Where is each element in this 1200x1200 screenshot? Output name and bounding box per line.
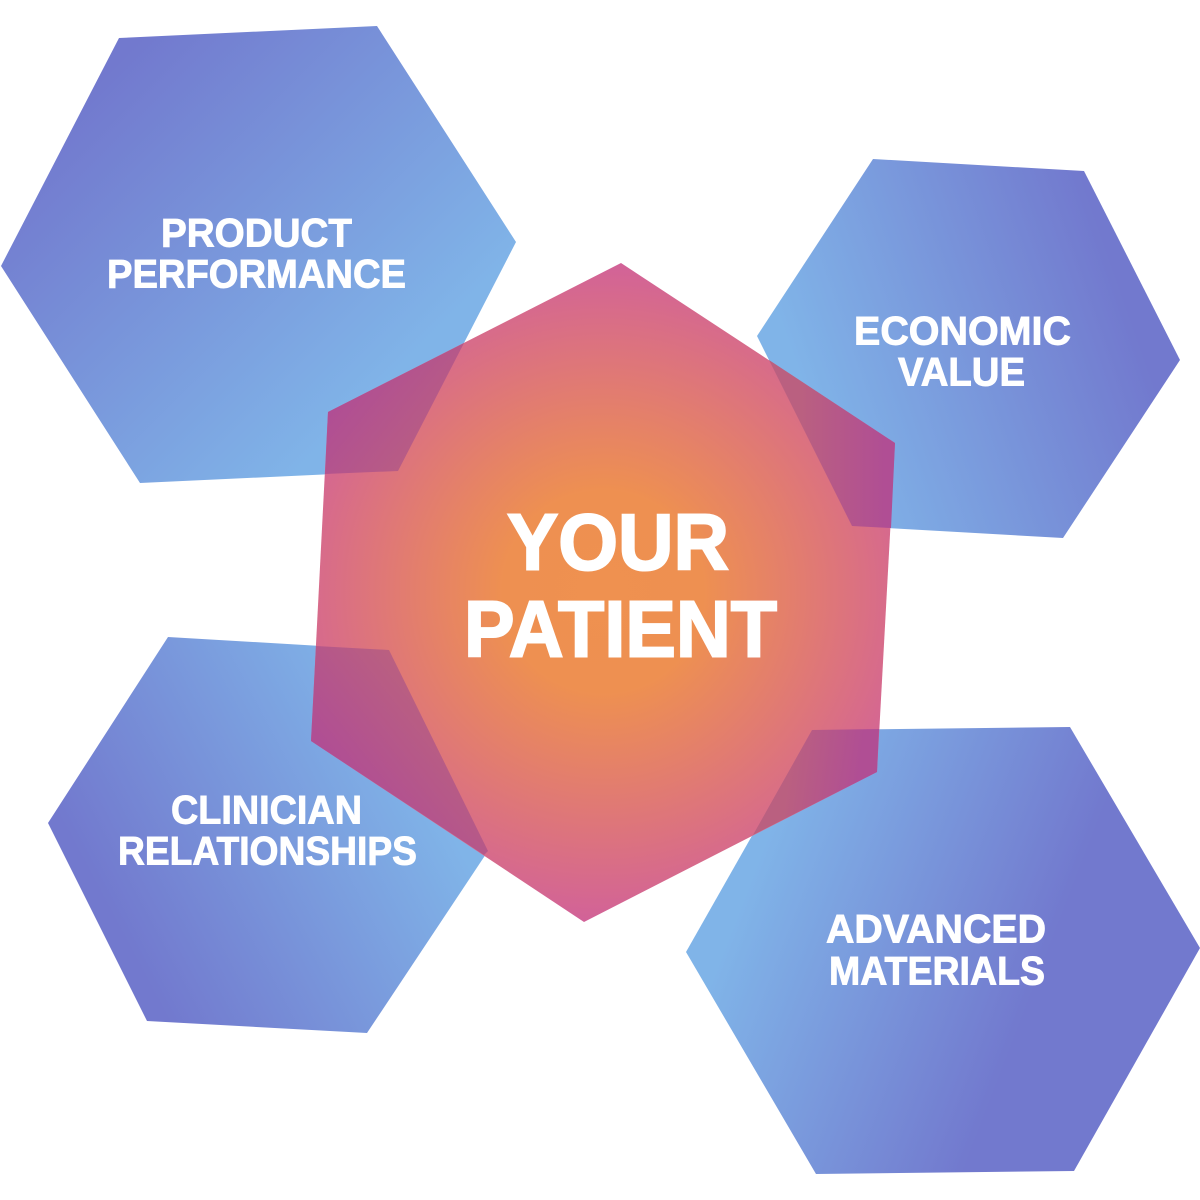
label: advanced materials: ADVANCED xyxy=(826,908,1046,952)
label: clinician relationships: RELATIONSHIPS xyxy=(118,830,417,874)
central hexagon: your patient xyxy=(311,263,895,922)
label: advanced materials xyxy=(826,908,1046,994)
label: economic value xyxy=(854,310,1071,394)
hexagon: economic value xyxy=(757,159,1180,538)
label: economic value: ECONOMIC xyxy=(854,310,1071,354)
label: clinician relationships: CLINICIAN xyxy=(171,788,362,832)
label: clinician relationships xyxy=(118,788,417,874)
label: product performance: PRODUCT xyxy=(161,212,352,256)
label: product performance: PERFORMANCE xyxy=(107,252,406,296)
hexagon: clinician relationships xyxy=(48,637,488,1033)
label: advanced materials: MATERIALS xyxy=(829,950,1045,994)
label: economic value: VALUE xyxy=(898,350,1025,394)
label: product performance xyxy=(107,212,406,296)
overlap: economic value with centre xyxy=(769,360,895,528)
hexagon: product performance xyxy=(1,26,516,483)
title: your patient xyxy=(464,498,777,674)
title: your patient: PATIENT xyxy=(464,584,777,674)
overlap: clinician relationships with centre xyxy=(311,646,488,855)
title: your patient: YOUR xyxy=(507,498,729,586)
overlap: advanced materials with centre xyxy=(753,729,879,835)
hexagon: advanced materials xyxy=(686,727,1200,1174)
overlap: product performance with centre xyxy=(325,343,464,474)
